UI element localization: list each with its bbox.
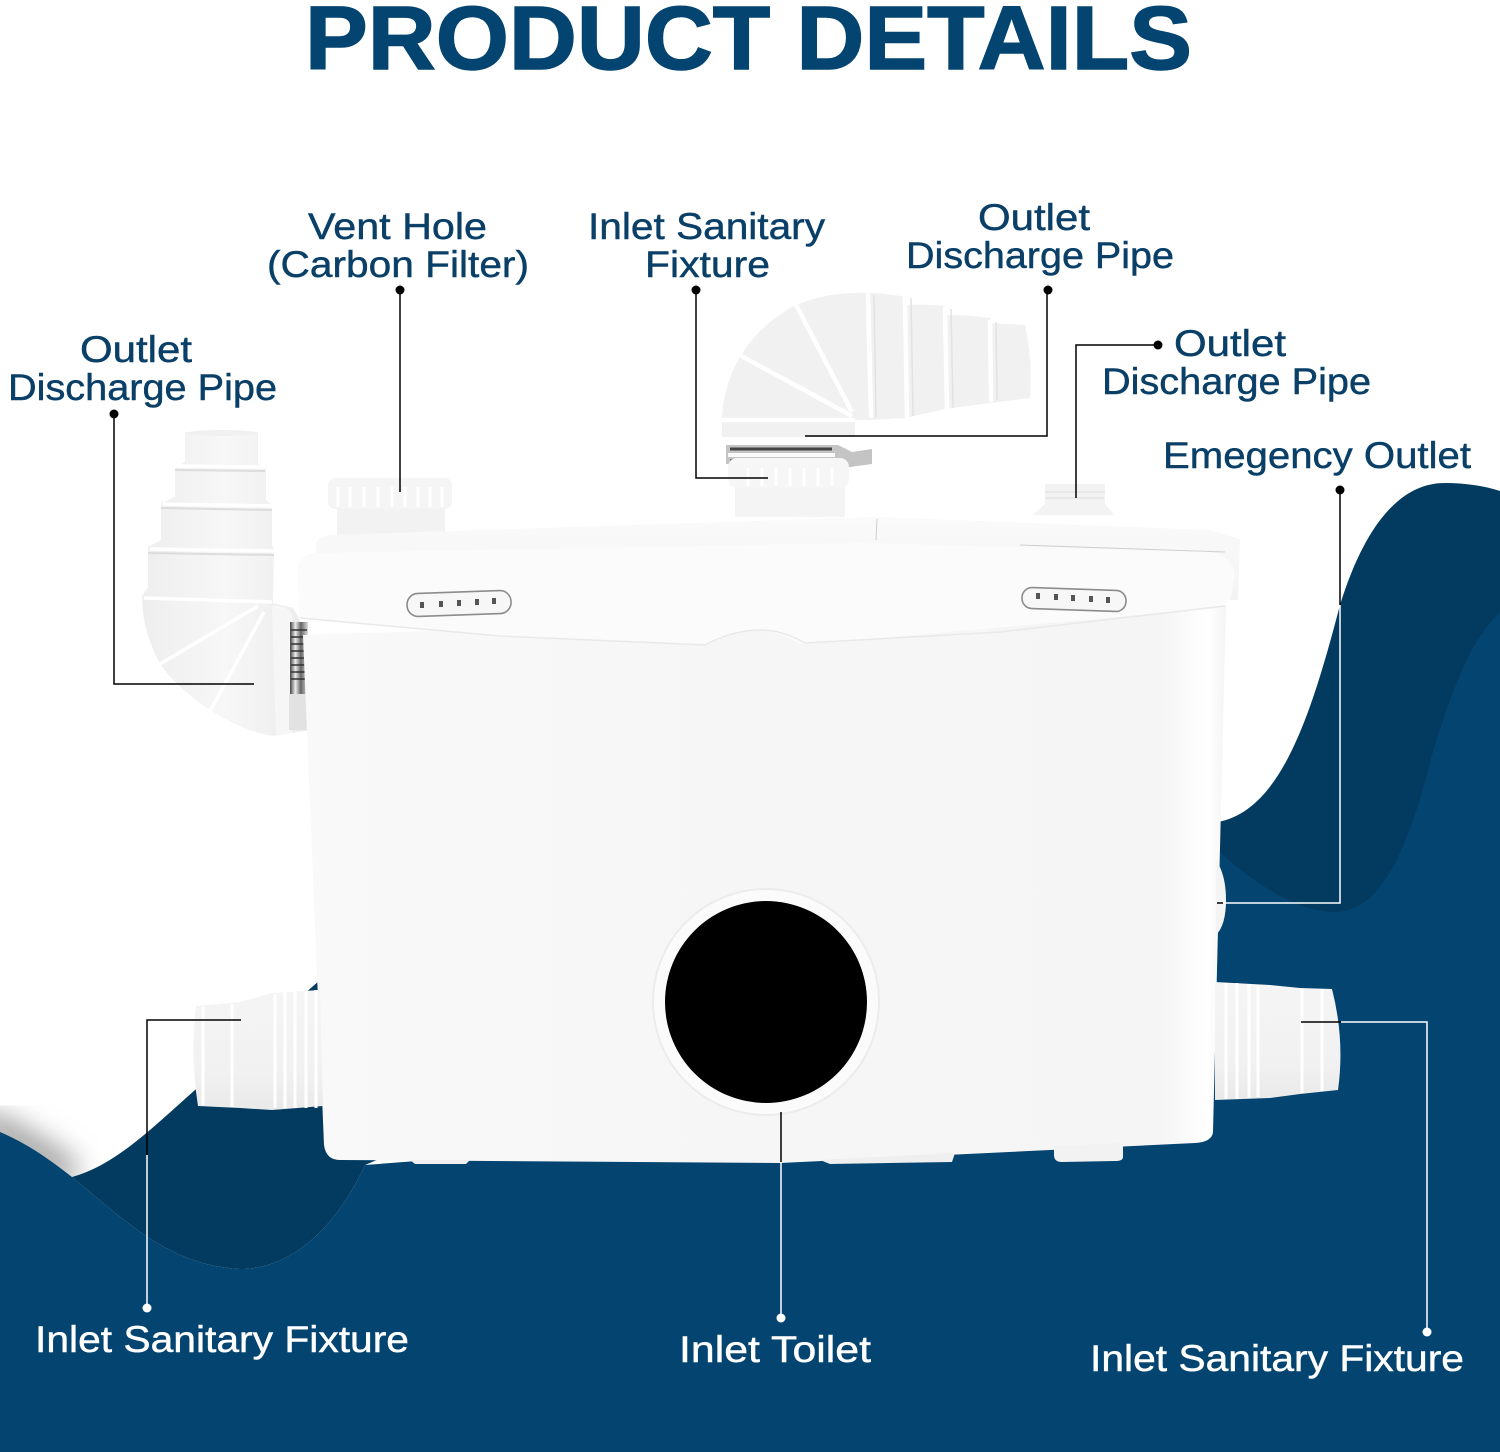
callout: top inlet sanitary fixture [588,206,826,478]
vent hole cap [328,478,452,540]
lid [316,517,1240,600]
callout: left outlet discharge pipe: Outlet [80,329,193,370]
callout: inlet toilet: Inlet Toilet [679,1329,872,1370]
product: macerator pump [142,293,1340,1164]
hose clamp [290,622,308,694]
emergency outlet bump [1216,860,1226,935]
callout: top outlet discharge pipe [805,197,1174,436]
top inlet nut [728,458,849,517]
pipe: left side outlet elbow [142,430,310,736]
callout: top outlet discharge pipe: Outlet [978,197,1091,238]
callout: emergency outlet: Emegency Outlet [1163,435,1472,476]
pump body [297,543,1235,1163]
toilet inlet hole [652,888,880,1116]
top outlet elbow [722,293,1031,467]
callout: left outlet discharge pipe [8,329,277,684]
callout: lower right inlet sanitary fixture: Inlet Sanitary Fixture [1090,1338,1464,1379]
callout: vent hole: Vent Hole [308,206,487,247]
callout: top outlet discharge pipe: Discharge Pipe [906,235,1174,276]
vent slot right [1022,587,1126,612]
bottom feet [410,1143,1123,1164]
callout: right outlet discharge pipe: Discharge Pipe [1102,361,1371,402]
callout: lower left inlet sanitary fixture [35,1020,409,1360]
top hose clamp [726,445,872,467]
callout: right outlet discharge pipe [1076,323,1371,498]
left inlet pipe [193,990,323,1110]
callout: top inlet sanitary fixture: Inlet Sanitary [588,206,826,247]
callout: right outlet discharge pipe: Outlet [1174,323,1287,364]
callout: emergency outlet [1163,435,1472,903]
callout: lower right inlet sanitary fixture [1090,1022,1464,1379]
callout: top inlet sanitary fixture: Fixture [645,244,770,285]
right nipple [1033,484,1114,515]
callout: left outlet discharge pipe: Discharge Pipe [8,367,277,408]
vent slot left [407,590,511,617]
callout: vent hole [267,206,529,492]
lid seam [876,519,1225,552]
callout: vent hole: (Carbon Filter) [267,244,529,285]
background waves [0,483,1500,1452]
right inlet pipe [1215,982,1340,1100]
callout: lower left inlet sanitary fixture: Inlet Sanitary Fixture [35,1319,409,1360]
callout: inlet toilet [679,1112,872,1370]
